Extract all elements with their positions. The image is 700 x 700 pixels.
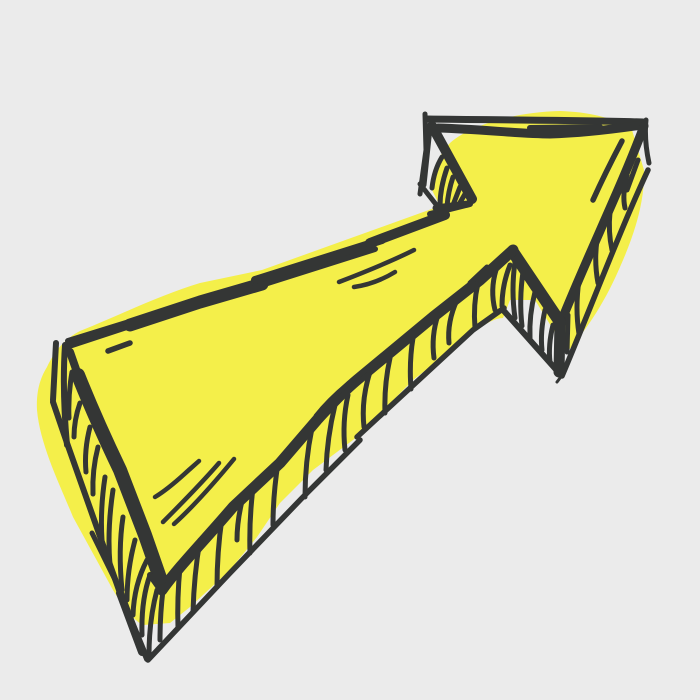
- notch hatch: [502, 262, 563, 382]
- arrow head top edge: [427, 119, 643, 134]
- head side hatch, left: [420, 114, 468, 208]
- left end hatching: [69, 372, 163, 655]
- left end of arrow: [53, 343, 160, 659]
- lower shaft edge: [148, 250, 513, 660]
- lower shaft hatching: [178, 270, 496, 628]
- head side hatch, right: [562, 120, 649, 376]
- arrow head inner edges: [432, 126, 644, 322]
- highlight strokes top: [108, 250, 414, 351]
- arrow outline: [53, 114, 649, 660]
- top edge of shaft: [66, 204, 470, 347]
- highlight strokes bottom: [155, 459, 234, 524]
- yellow paint blob: [37, 111, 644, 625]
